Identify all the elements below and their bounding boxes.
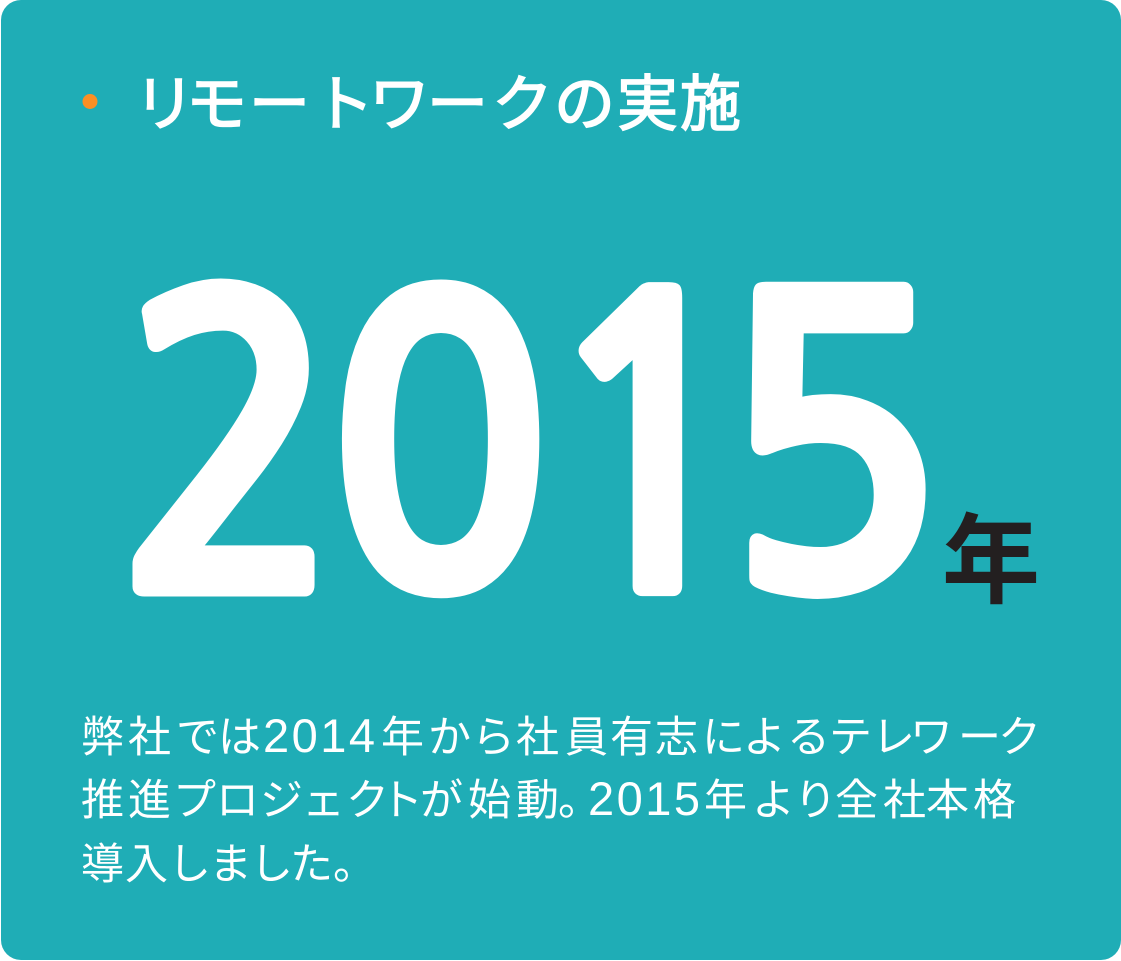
description text: 年から社員有志によるテレワーク	[381, 714, 1041, 762]
heading: リモートワークの実施	[134, 70, 741, 138]
big year number: 2015	[116, 254, 945, 650]
description text: 推進プロジェクトが始動。	[81, 777, 601, 825]
description text: 2014	[263, 709, 378, 762]
icon: orange bullet	[82, 94, 98, 109]
description text	[81, 709, 1041, 889]
description text: 年より全社本格	[704, 777, 1016, 825]
description text: 導入しました。	[81, 841, 376, 889]
year unit: 年	[942, 506, 1040, 616]
description text: 弊社では	[81, 714, 261, 762]
description text: 2015	[588, 772, 703, 825]
